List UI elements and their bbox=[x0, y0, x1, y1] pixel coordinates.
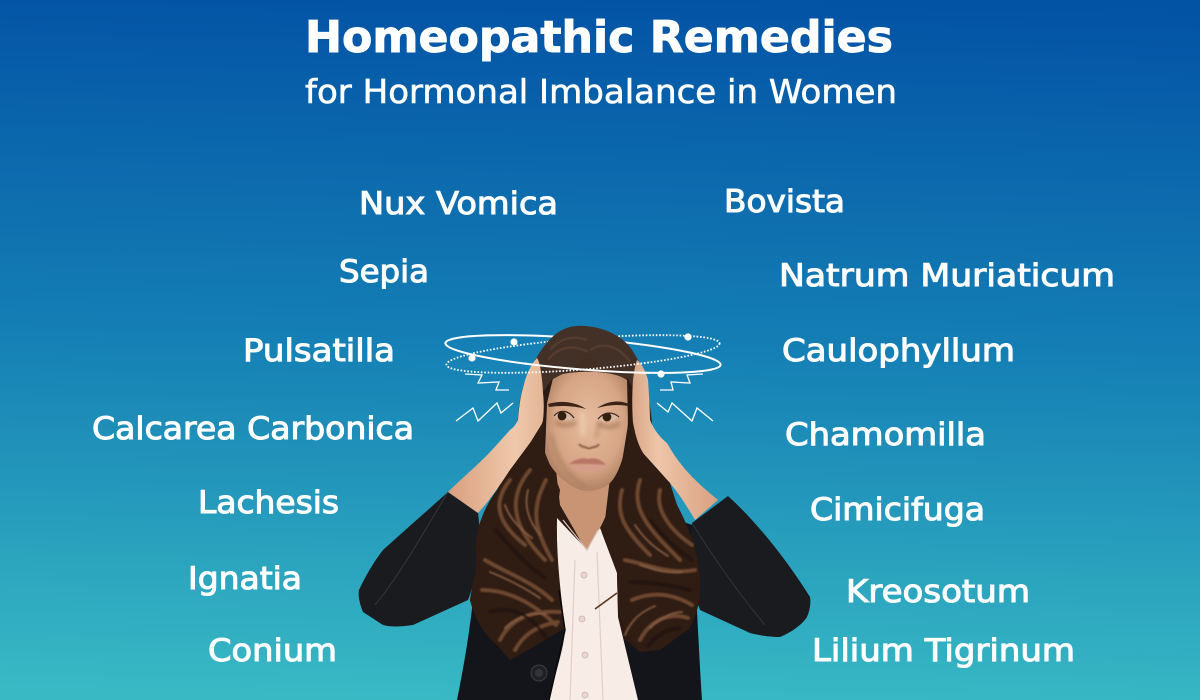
front right hair bbox=[600, 423, 700, 652]
stray hair strand on shirt bbox=[595, 593, 617, 609]
eyes bbox=[554, 411, 619, 421]
sleeve fold lines bbox=[375, 492, 765, 700]
orbit rings front arcs bbox=[525, 362, 650, 374]
right remedies list bbox=[724, 184, 1115, 669]
nose bbox=[579, 444, 599, 449]
left remedies list bbox=[92, 186, 558, 669]
title: Homeopathic Remedies bbox=[305, 12, 893, 63]
subtitle: for Hormonal Imbalance in Women bbox=[305, 72, 897, 111]
left remedies list: Calcarea Carbonica bbox=[92, 411, 414, 447]
woman holding her head bbox=[359, 326, 810, 700]
shirt bbox=[549, 518, 638, 700]
left remedies list: Nux Vomica bbox=[359, 186, 558, 222]
left remedies list: Pulsatilla bbox=[243, 333, 395, 369]
right remedies list: Bovista bbox=[724, 184, 845, 220]
lightning zigzags bbox=[456, 374, 713, 421]
left remedies list: Lachesis bbox=[198, 485, 339, 521]
side hair by temples bbox=[540, 378, 645, 470]
orbit dots bbox=[468, 333, 692, 378]
back hair bbox=[470, 326, 700, 660]
neck bbox=[556, 470, 610, 552]
top hair bbox=[527, 326, 648, 400]
right remedies list: Cimicifuga bbox=[810, 492, 985, 528]
face shading bbox=[552, 412, 620, 487]
shirt buttons bbox=[579, 572, 588, 698]
face bbox=[545, 372, 629, 491]
hair part highlights bbox=[548, 338, 630, 362]
left remedies list: Ignatia bbox=[188, 561, 302, 597]
right remedies list: Kreosotum bbox=[846, 574, 1030, 610]
shirt placket shading bbox=[563, 520, 603, 700]
right forearm and hand bbox=[632, 360, 718, 520]
lips bbox=[569, 458, 606, 471]
eyebrows bbox=[548, 401, 629, 409]
left remedies list: Conium bbox=[208, 633, 337, 669]
left sleeve bbox=[359, 492, 480, 626]
right sleeve bbox=[690, 496, 810, 637]
jacket button bbox=[531, 665, 547, 681]
right remedies list: Chamomilla bbox=[785, 417, 986, 453]
right remedies list: Natrum Muriaticum bbox=[779, 258, 1115, 294]
jacket body bbox=[457, 495, 702, 700]
left remedies list: Sepia bbox=[339, 254, 429, 290]
front left hair bbox=[470, 422, 565, 660]
right remedies list: Caulophyllum bbox=[782, 333, 1015, 369]
hair wave highlights bbox=[482, 470, 695, 650]
dizziness orbit rings bbox=[444, 328, 722, 380]
left forearm and hand bbox=[448, 358, 544, 513]
right remedies list: Lilium Tigrinum bbox=[812, 633, 1075, 669]
